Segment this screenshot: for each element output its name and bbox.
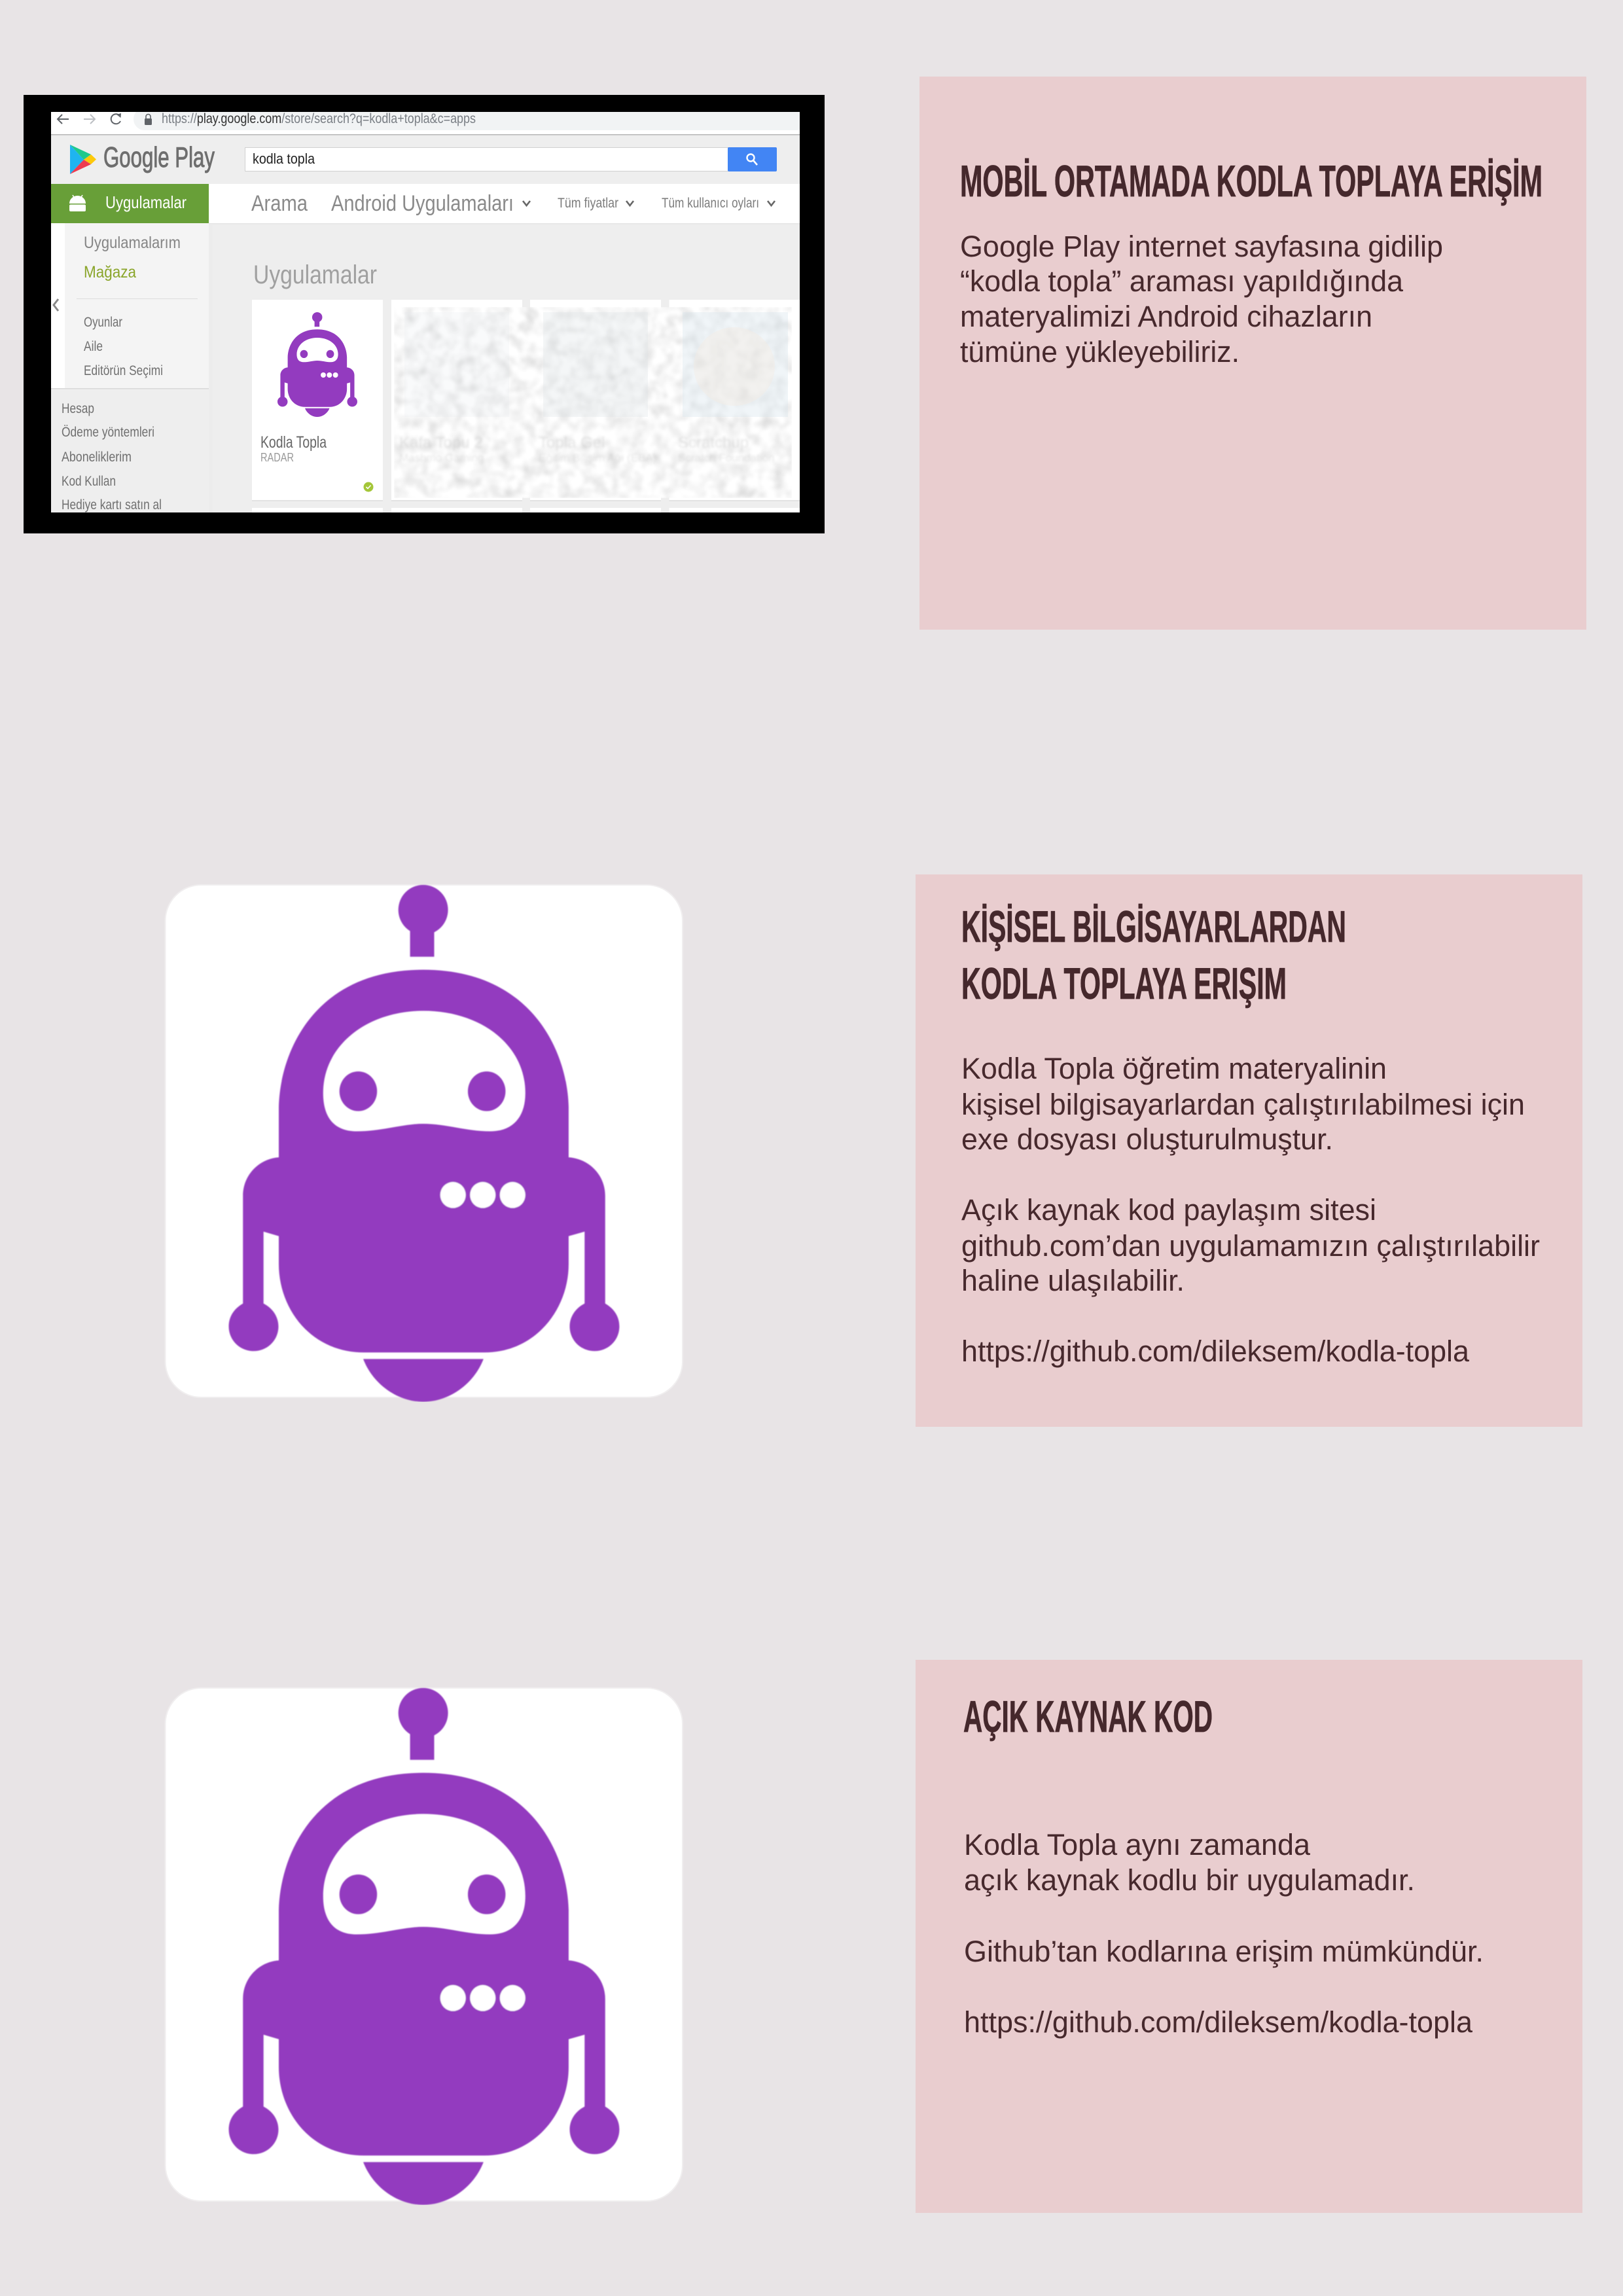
icon card: robot 1 — [165, 885, 683, 1402]
body text: Kodla Topla aynı zamanda — [964, 1828, 1311, 1861]
sidebar: Ödeme yöntemleri — [62, 425, 154, 440]
body text: “kodla topla” araması yapıldığında — [960, 264, 1404, 298]
app card: Kodla Topla: Kodla Topla — [260, 433, 327, 452]
blurred other apps: Eğitim Bilişim Ağı (EBA) — [539, 452, 656, 464]
body text — [960, 230, 1443, 368]
body text: https://github.com/dileksem/kodla-topla — [961, 1335, 1470, 1368]
nav bar: Android Uygulamaları — [331, 191, 514, 216]
sidebar: Aile — [84, 339, 103, 354]
panel: mobile access — [919, 77, 1586, 630]
icon card: robot 2 — [165, 1688, 683, 2205]
sidebar: Oyunlar — [84, 315, 122, 330]
panel: personal computers — [916, 874, 1582, 1427]
heading: AÇIK KAYNAK KOD — [963, 1692, 1213, 1742]
nav bar: Tüm fiyatlar — [558, 196, 618, 211]
body text: Kodla Topla öğretim materyalinin — [961, 1052, 1387, 1085]
section heading: Uygulamalar — [253, 260, 377, 289]
nav bar — [209, 184, 800, 224]
sidebar: Uygulamalarım — [84, 234, 181, 252]
blurred other apps: Kafa Topu 2 — [399, 434, 483, 452]
body text: Github’tan kodlarına erişim mümkündür. — [964, 1935, 1484, 1968]
body text: exe dosyası oluşturulmuştur. — [961, 1122, 1333, 1156]
app cards — [252, 300, 800, 513]
blurred other apps: Scratch Foundation — [678, 452, 774, 464]
browser address bar: https://play.google.com/store/search?q=kodla+topla&c=apps — [162, 111, 476, 126]
body text: kişisel bilgisayarlardan çalıştırılabilmesi için — [961, 1088, 1525, 1121]
sidebar — [51, 184, 213, 512]
sidebar: Hediye kartı satın al — [62, 497, 162, 512]
body text: materyalimizi Android cihazların — [960, 300, 1372, 333]
browser address bar — [51, 112, 800, 135]
body text: Açık kaynak kod paylaşım sitesi — [961, 1193, 1376, 1227]
search box: kodla topla — [253, 151, 315, 167]
blurred other apps: Topla Gel — [539, 434, 605, 452]
Google Play logo: Google Play — [103, 141, 215, 173]
blurred other apps: Mashmo Gaming — [399, 452, 484, 464]
heading — [961, 902, 1346, 1009]
body text: github.com’dan uygulamamızın çalıştırılabilir — [961, 1229, 1540, 1263]
sidebar: Kod Kullan — [62, 474, 116, 489]
app card: Kodla Topla — [260, 312, 373, 492]
Google Play logo — [70, 141, 215, 174]
panel: Google Play screenshot — [24, 95, 825, 533]
body text: https://github.com/dileksem/kodla-topla — [964, 2005, 1473, 2039]
blurred other apps: Scratchup — [678, 434, 749, 452]
heading: KİŞİSEL BİLGİSAYARLARDAN — [961, 902, 1346, 952]
search box — [245, 147, 777, 171]
sidebar: Aboneliklerim — [62, 450, 132, 465]
body text: açık kaynak kodlu bir uygulamadır. — [964, 1863, 1415, 1897]
app card: Kodla Topla: RADAR — [260, 451, 294, 464]
blurred other apps — [394, 307, 792, 498]
nav bar: Tüm kullanıcı oyları — [662, 196, 759, 211]
sidebar: Uygulamalar — [105, 192, 187, 212]
heading: KODLA TOPLAYA ERIŞIM — [961, 959, 1287, 1009]
body text: tümüne yükleyebiliriz. — [960, 335, 1240, 368]
body text — [961, 1052, 1540, 1368]
body text: haline ulaşılabilir. — [961, 1264, 1185, 1297]
body text: Google Play internet sayfasına gidilip — [960, 230, 1443, 263]
sidebar: Editörün Seçimi — [84, 363, 163, 378]
body text — [964, 1828, 1484, 2039]
sidebar: Mağaza — [84, 263, 136, 281]
nav bar: Arama — [251, 191, 308, 216]
panel: open source — [916, 1660, 1582, 2213]
sidebar: Hesap — [62, 401, 94, 416]
